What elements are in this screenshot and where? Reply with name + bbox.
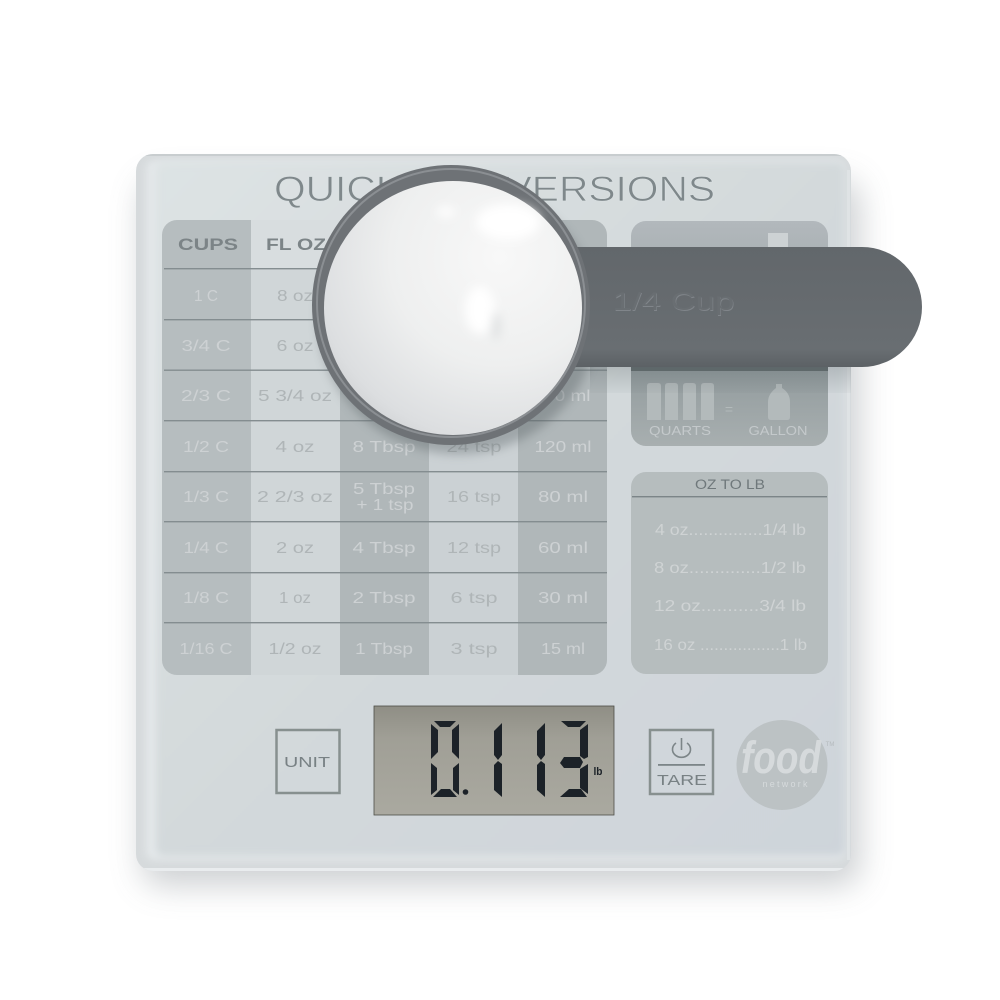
column: cups: 1/2 C [183,439,229,456]
button: unit: UNIT [284,754,330,771]
column: fluid ounces: 4 oz [276,439,314,456]
column: teaspoons: 3 tsp [450,641,498,658]
column: tablespoons: + 1 tsp [356,497,414,514]
sugar mounds [437,204,540,340]
digit 1 [537,723,545,797]
panel: ounces to pounds [631,472,828,674]
scale drop shadow [142,180,860,886]
column: tablespoons: 1 Tbsp [355,641,413,658]
column: cups: 1/16 C [180,641,232,658]
column: fluid ounces: 8 oz [277,288,313,305]
measuring cup handle [560,247,922,367]
icon: four quart bottles [647,383,714,420]
button: unit [276,730,340,793]
digit 0 [431,721,459,797]
column: cups: 1 C [194,288,218,305]
button: tare [650,730,713,794]
conversion rows: 16 oz .................1 lb [654,637,807,654]
lcd display [374,706,614,815]
decimal point [463,789,468,795]
digit 3 [560,721,588,797]
unit label: lb [594,766,603,778]
embossed label: 1/4 Cup: 1/4 Cup [613,289,735,317]
lcd digits reading 0.113 lb [431,721,603,797]
column: cups: 3/4 C [182,338,230,355]
column: millilitres: 120 ml [534,439,592,456]
logo: food network [736,720,834,810]
column: teaspoons: 12 tsp [447,540,501,557]
column: cups [178,235,238,658]
digit 1 [494,723,502,797]
column: fluid ounces: 1 oz [279,590,311,607]
column: tablespoons: 8 Tbsp [352,439,416,456]
label: gallon: GALLON [748,423,808,438]
button: tare: TARE [657,772,707,789]
column: fluid ounces: 2 oz [276,540,314,557]
logo: food network: TM [826,742,834,748]
embossed label: 1/4 Cup: 1/4 Cup [612,288,734,316]
measuring cup with sugar [312,165,590,445]
equals sign: = [725,401,733,417]
column: teaspoons [446,439,502,658]
column: tablespoons: 5 Tbsp [353,481,415,498]
scale glass plate [136,154,851,871]
panel: conversion table [162,220,607,675]
logo: food network: food [741,732,822,783]
column: cups: 2/3 C [181,388,231,405]
conversion rows: 12 oz...........3/4 lb [654,598,806,615]
product photo: kitchen scale with measuring cup [127,154,922,901]
column: cups: 1/4 C [184,540,228,557]
column: millilitres [534,388,592,658]
column: fluid ounces: FL OZ [266,235,326,254]
column: fluid ounces: 5 3/4 oz [258,388,332,405]
panel: quarts to gallon [631,221,828,446]
icon: gallon jug [768,384,790,420]
column: fluid ounces: 6 oz [276,338,314,355]
column: cups: 1/3 C [183,489,229,506]
column: millilitres: 15 ml [541,641,585,658]
column: tablespoons: 4 Tbsp [352,540,416,557]
column: cups: CUPS [178,235,238,254]
column: fluid ounces: 1/2 oz [268,641,322,658]
embossed label: 1/4 Cup [612,288,735,317]
label: quarts: QUARTS [649,423,711,438]
column: teaspoons: 24 tsp [446,439,502,456]
conversion rows [654,522,807,654]
column: millilitres: 30 ml [538,590,588,607]
column: millilitres: 60 ml [538,540,588,557]
handle and cup cast shadow [318,182,851,454]
logo: food network: network [762,779,808,789]
heading: oz to lb: OZ TO LB [695,477,765,492]
title: QUICK CONVERSIONS [274,170,715,209]
column: cups: 1/8 C [183,590,229,607]
column: tablespoons [352,439,416,658]
column: fluid ounces: 2 2/3 oz [257,489,333,506]
conversion rows: 8 oz..............1/2 lb [654,560,806,577]
icon: power [673,738,691,757]
icon: upper bottle [768,233,788,247]
column: millilitres: 160 ml [534,388,590,405]
column: fluid ounces [257,235,333,658]
column: tablespoons: 2 Tbsp [352,590,416,607]
column: teaspoons: 16 tsp [447,489,501,506]
column: millilitres: 80 ml [538,489,588,506]
column: teaspoons: 6 tsp [450,590,498,607]
conversion rows: 4 oz...............1/4 lb [655,522,806,539]
